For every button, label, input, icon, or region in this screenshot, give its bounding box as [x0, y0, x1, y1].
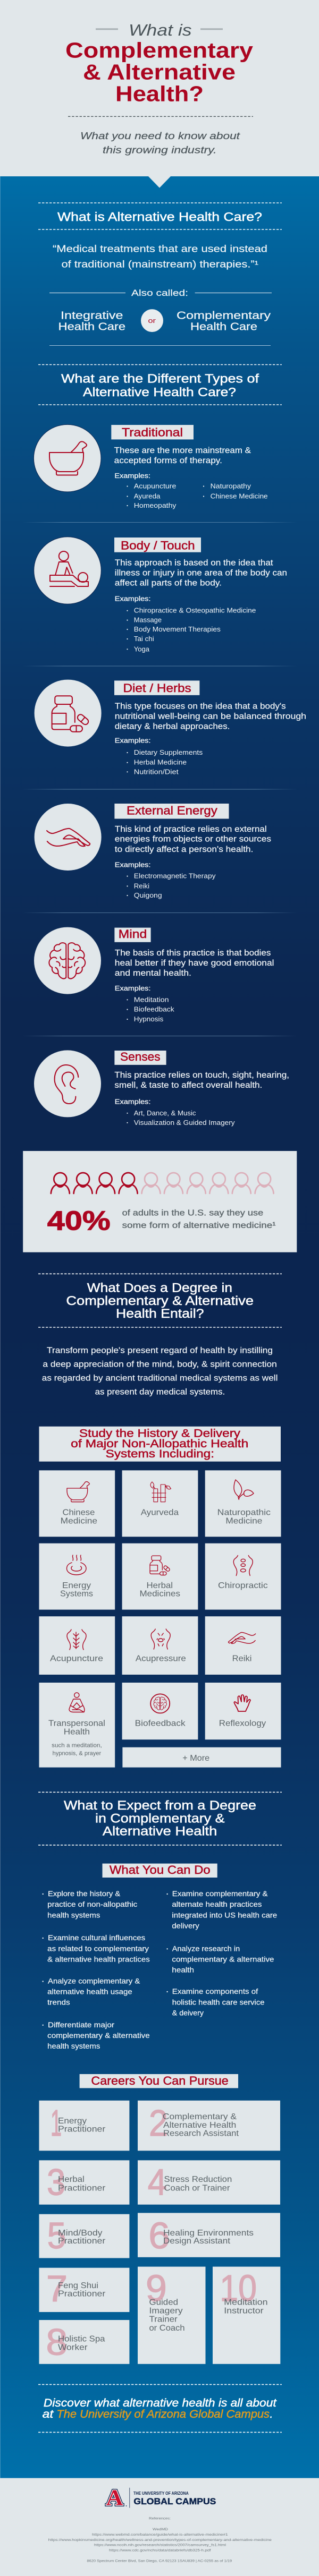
description: dietary & herbal approaches.: [115, 722, 230, 731]
label: Reflexology: [219, 1719, 266, 1728]
references: 8620 Spectrum Center Blvd, San Diego, CA 92123 1SAU839 | AC-0255 as of 1/19: [87, 2560, 232, 2563]
list: what you can do, left column: Analyze complementary &: [48, 1977, 140, 1985]
career 8: 8: [46, 2321, 68, 2362]
list: what you can do, left column: Differentiate major: [48, 2020, 114, 2029]
examples list: [115, 594, 256, 653]
description: [115, 559, 287, 588]
icon: mortar: [67, 1482, 89, 1502]
references: https://www.nccih.nih.gov/research/statistics/2007/camsurvey_fs1.html: [94, 2544, 226, 2547]
examples list: Biofeedback: [134, 1006, 174, 1013]
degree description: as regarded by ancient traditional medical systems as well: [42, 1374, 278, 1383]
description: [115, 949, 274, 978]
logo: A: [106, 2486, 123, 2510]
career 10: [213, 2267, 280, 2364]
label: Systems: [60, 1590, 93, 1599]
description: [114, 446, 251, 465]
career 5: Practitioner: [58, 2237, 106, 2246]
logo: A: [106, 2486, 123, 2510]
list: what you can do, left column: health systems: [47, 1910, 100, 1919]
card: ayurveda: [122, 1470, 198, 1537]
examples list: [114, 472, 268, 509]
logo: A: [106, 2486, 123, 2510]
subtitle: What you need to know about: [80, 131, 240, 141]
heading: traditional: Traditional: [122, 426, 183, 439]
heading: mind: [114, 927, 151, 942]
examples list: Homeopathy: [134, 502, 177, 509]
career 4: Stress Reduction: [164, 2175, 232, 2184]
career 5: 5: [47, 2215, 66, 2256]
statistic text: of adults in the U.S. say they use: [122, 1208, 263, 1217]
statistic text: [122, 1208, 275, 1230]
list: what you can do, left column: & alternative health practices: [47, 1955, 150, 1963]
heading: external energy: [114, 804, 229, 819]
heading: body touch: Body / Touch: [121, 539, 195, 552]
panel: study heading: [39, 1427, 281, 1462]
panel: study heading: Systems Including:: [106, 1448, 214, 1460]
examples list: Tai chi: [134, 635, 154, 643]
card: chiropractic: [205, 1543, 281, 1610]
icon: brain in circle: [150, 1694, 170, 1713]
label: Reiki: [232, 1654, 251, 1663]
career 9: [138, 2267, 205, 2364]
examples list: Acupuncture: [134, 482, 176, 490]
card: acupuncture: [39, 1616, 115, 1675]
logo: [106, 2486, 216, 2510]
career 5: Mind/Body: [58, 2229, 102, 2238]
call to action: [38, 2384, 282, 2432]
term: complementary health care: Complementary: [177, 310, 271, 322]
label: Naturopathic: [217, 1508, 271, 1517]
list: what you can do, left column: [43, 1889, 150, 2050]
panel: body touch: [34, 537, 287, 653]
examples list: Dietary Supplements: [134, 749, 203, 756]
icon: back needles: [67, 1630, 86, 1650]
icon: hand: [229, 1632, 256, 1643]
list: what you can do, right column: delivery: [172, 1922, 199, 1930]
career 1: [39, 2101, 129, 2151]
subtitle: this growing industry.: [103, 144, 217, 155]
description: These are the more mainstream &: [114, 446, 251, 455]
examples list: Examples:: [115, 594, 150, 602]
call to action: .: [270, 2408, 273, 2420]
list: what you can do, right column: Analyze research in: [172, 1944, 240, 1952]
label: Medicine: [61, 1517, 97, 1526]
description: heal better if they have good emotional: [115, 959, 274, 968]
footer: [0, 2478, 319, 2576]
header panel: [65, 21, 253, 155]
examples list: Quigong: [134, 892, 162, 899]
icon: open hand: [234, 1695, 250, 1711]
card: biofeedback: [122, 1683, 198, 1739]
statistic text: some form of alternative medicine¹: [122, 1221, 275, 1230]
description: accepted forms of therapy.: [114, 456, 222, 465]
examples list: Herbal Medicine: [134, 759, 187, 766]
description: smell, & taste to affect overall health.: [114, 1081, 262, 1090]
description: illness or injury in one area of the body can: [115, 569, 287, 578]
heading: senses: [114, 1050, 166, 1065]
label: Acupressure: [136, 1654, 186, 1663]
career 6: 6: [148, 2215, 170, 2256]
card: naturopathic medicine: [205, 1470, 281, 1537]
call to action: at: [43, 2408, 54, 2420]
section heading: degree: Health Entail?: [116, 1307, 204, 1321]
pictogram: 4 of 10 people: [51, 1173, 274, 1193]
list: what you can do, right column: Examine complementary &: [172, 1889, 268, 1898]
label: Chiropractic: [218, 1581, 268, 1590]
career 3: [39, 2160, 129, 2205]
description: This kind of practice relies on external: [115, 825, 267, 834]
career 9: 9: [146, 2267, 167, 2309]
career 2: 2: [149, 2102, 168, 2144]
label: Chinese: [63, 1508, 95, 1517]
panel: diet herbs: [35, 680, 306, 775]
description: The basis of this practice is that bodies: [115, 949, 271, 958]
section heading: degree: [38, 1274, 282, 1327]
career 6: [138, 2213, 280, 2257]
icon: energy: [67, 1555, 86, 1575]
references: https://www.hopkinsmedicine.org/health/wellness-and-prevention/types-of-complementary-and-alternative-medicine: [48, 2539, 272, 2542]
list: what you can do, left column: health systems: [47, 2042, 100, 2050]
label: Ayurveda: [141, 1508, 179, 1517]
examples list: Examples:: [115, 984, 150, 992]
career 2: Complementary &: [163, 2112, 237, 2121]
title: Health?: [115, 82, 204, 106]
section heading: what to expect: What to Expect from a Degree: [64, 1798, 256, 1813]
career 9: Imagery: [149, 2306, 183, 2316]
examples list: Hypnosis: [134, 1016, 163, 1023]
label: [61, 1508, 97, 1526]
list: what you can do, right column: holistic health care service: [172, 1998, 265, 2007]
card: energy systems: [39, 1543, 115, 1610]
icon: brain: [34, 927, 101, 994]
career 10: 10: [220, 2267, 257, 2309]
examples list: Yoga: [134, 645, 149, 653]
career 2: Research Assistant: [163, 2129, 239, 2138]
label: Herbal: [147, 1581, 173, 1590]
career 9: Trainer: [149, 2315, 178, 2324]
career 9: Guided: [149, 2298, 178, 2307]
examples list: Chiropractice & Osteopathic Medicine: [134, 607, 256, 615]
definition quote: “Medical treatments that are used instead: [53, 244, 267, 254]
list: what you can do, left column: as related to complementary: [47, 1944, 149, 1952]
examples list: Nutrition/Diet: [134, 768, 179, 775]
description: [114, 1071, 289, 1090]
heading: careers: Careers You Can Pursue: [91, 2074, 229, 2087]
career 7: Feng Shui: [58, 2281, 98, 2290]
panel: mind: [34, 927, 274, 1023]
career 8: Holistic Spa: [58, 2335, 105, 2343]
label: Energy: [62, 1581, 91, 1590]
career 8: Worker: [58, 2343, 88, 2352]
heading: external energy: External Energy: [127, 804, 217, 817]
icon: back pressure: [151, 1629, 170, 1649]
references: https://www.webmd.com/balance/guide/what-is-alternative-medicine#1: [92, 2534, 228, 2537]
examples list: Chinese Medicine: [211, 493, 268, 500]
icon: spine: [233, 1555, 253, 1575]
icon: leaves: [234, 1480, 254, 1499]
list: what you can do, right column: & deivery: [172, 2008, 204, 2017]
also called: Also called:: [131, 288, 188, 298]
card: transpersonal health: [39, 1683, 115, 1768]
examples list: Naturopathy: [211, 482, 251, 490]
label: such a meditation,: [52, 1743, 102, 1749]
references: References:: [149, 2518, 171, 2521]
label: Acupuncture: [50, 1654, 103, 1663]
label: [48, 1719, 105, 1757]
description: This type focuses on the idea that a body's: [115, 702, 286, 711]
examples list: Examples:: [114, 472, 150, 480]
heading: mind: Mind: [119, 927, 147, 941]
icon: bamboo: [150, 1482, 171, 1502]
section heading: what to expect: Alternative Health: [103, 1824, 217, 1838]
description: to directly affect a person's health.: [115, 845, 253, 854]
career 8: [39, 2320, 129, 2364]
degree description: [42, 1346, 278, 1396]
card: acupressure: [122, 1616, 198, 1675]
or badge: [141, 309, 163, 332]
label: Medicine: [225, 1517, 262, 1526]
card: chinese medicine: [39, 1470, 115, 1537]
label: [60, 1581, 93, 1599]
label: Health: [64, 1728, 90, 1737]
heading: senses: Senses: [120, 1050, 161, 1063]
call to action: Discover what alternative health is all about: [44, 2397, 277, 2409]
examples list: Examples:: [115, 737, 150, 745]
list: what you can do, right column: integrated into US health care: [172, 1910, 277, 1919]
examples list: Ayureda: [134, 493, 161, 500]
career 6: Healing Environments: [163, 2229, 254, 2238]
label: Medicines: [139, 1590, 180, 1599]
big number: 40%: [47, 1206, 111, 1236]
label: Biofeedback: [135, 1719, 186, 1728]
career 2: Alternative Health: [163, 2121, 236, 2130]
degree description: a deep appreciation of the mind, body, & spirit connection: [43, 1360, 277, 1369]
panel: senses: [34, 1050, 289, 1127]
label: hypnosis, & prayer: [53, 1751, 102, 1757]
call to action: The University of Arizona Global Campus: [56, 2408, 270, 2420]
panel: study heading: of Major Non-Allopathic Health: [71, 1438, 248, 1450]
panel: study heading: Study the History & Delivery: [79, 1428, 241, 1440]
section heading: what to expect: [38, 1792, 282, 1845]
career 5: [39, 2214, 129, 2258]
card: herbal medicines: [122, 1543, 198, 1610]
list: what you can do, right column: alternate health practices: [172, 1900, 262, 1908]
label: [139, 1581, 180, 1599]
heading: diet herbs: Diet / Herbs: [123, 681, 191, 695]
examples list: Body Movement Therapies: [134, 626, 221, 633]
term: complementary health care: [177, 310, 271, 332]
career 3: Practitioner: [58, 2183, 106, 2193]
references: [48, 2518, 272, 2563]
icon: bottle: [150, 1556, 170, 1575]
degree description: Transform people's present regard of health by instilling: [47, 1346, 273, 1355]
section heading: types: Alternative Health Care?: [83, 385, 236, 399]
examples list: [115, 984, 174, 1023]
career 4: 4: [148, 2162, 167, 2203]
icon: pill bottle: [35, 680, 102, 747]
examples list: Art, Dance, & Music: [134, 1110, 196, 1117]
list: what you can do, left column: Explore the history &: [48, 1889, 121, 1898]
examples list: [115, 861, 216, 899]
examples list: Visualization & Guided Imagery: [134, 1119, 235, 1127]
icon: meditation: [69, 1693, 85, 1712]
icon: mortar and pestle: [33, 424, 101, 492]
section heading: types: What are the Different Types of: [61, 372, 259, 386]
card: reiki: [205, 1616, 281, 1675]
heading: traditional: [111, 425, 194, 439]
career 7: [39, 2268, 129, 2312]
career 9: or Coach: [149, 2324, 185, 2333]
list: what you can do, left column: alternative health usage: [47, 1988, 132, 1996]
label: Transpersonal: [48, 1719, 105, 1728]
title: & Alternative: [83, 59, 236, 84]
panel: external energy: [35, 804, 271, 899]
section heading: types: [38, 364, 282, 405]
description: [115, 825, 271, 854]
examples list: Electromagnetic Therapy: [134, 873, 216, 880]
description: This approach is based on the idea that: [115, 559, 273, 568]
section heading: what to expect: in Complementary &: [95, 1811, 224, 1826]
examples list: [115, 737, 203, 775]
or badge: or: [148, 317, 156, 325]
card: reflexology: [205, 1683, 281, 1739]
career 6: Design Assistant: [163, 2237, 231, 2246]
card: more: [122, 1747, 281, 1768]
career 10: Meditation: [224, 2298, 268, 2307]
career 1: Practitioner: [58, 2125, 106, 2134]
icon: massage: [34, 537, 101, 604]
section heading: degree: Complementary & Alternative: [66, 1294, 254, 1308]
panel: 40 percent statistic: [23, 1151, 297, 1252]
career 4: Coach or Trainer: [164, 2183, 230, 2193]
list: what you can do, left column: complementary & alternative: [47, 2031, 150, 2040]
logo: GLOBAL CAMPUS: [133, 2496, 216, 2506]
examples list: Meditation: [134, 996, 169, 1003]
title: [65, 21, 253, 106]
definition quote: of traditional (mainstream) therapies.”¹: [62, 259, 258, 270]
header arrow: [148, 176, 171, 188]
logo: THE UNIVERSITY OF ARIZONA: [133, 2490, 189, 2496]
card: more: + More: [182, 1754, 209, 1763]
career 10: Instructor: [224, 2306, 264, 2316]
career 2: [138, 2101, 280, 2151]
description: nutritional well-being can be balanced through: [115, 712, 306, 721]
title: Complementary: [65, 38, 253, 63]
section heading: degree: What Does a Degree in: [87, 1281, 232, 1295]
career 1: 1: [51, 2102, 62, 2144]
section: what is alternative health care: [38, 203, 282, 346]
examples list: Massage: [134, 617, 162, 624]
references: WedMD: [153, 2528, 169, 2531]
definition quote: [53, 244, 267, 270]
heading: What is Alternative Health Care?: [57, 210, 262, 224]
list: what you can do, right column: complementary & alternative: [172, 1955, 274, 1963]
career 7: 7: [46, 2268, 68, 2309]
icon: ear: [34, 1050, 101, 1117]
list: what you can do, left column: Examine cultural influences: [48, 1933, 145, 1942]
career 3: Herbal: [58, 2175, 85, 2184]
career 3: 3: [47, 2162, 65, 2203]
panel: traditional: [33, 424, 268, 509]
subtitle: [80, 131, 240, 155]
description: This practice relies on touch, sight, hearing,: [114, 1071, 289, 1080]
career 1: Energy: [58, 2117, 87, 2126]
examples list: Reiki: [134, 882, 149, 890]
references: https://www.cdc.gov/nchs/data/databriefs/db325-h.pdf: [109, 2549, 211, 2553]
list: what you can do, left column: practice of non-allopathic: [47, 1900, 137, 1908]
term: complementary health care: Health Care: [190, 321, 257, 332]
career 4: [138, 2160, 280, 2205]
examples list: Examples:: [115, 1098, 150, 1106]
description: and mental health.: [115, 969, 191, 978]
label: [217, 1508, 271, 1526]
description: energies from objects or other sources: [115, 835, 271, 844]
list: what you can do, right column: health: [172, 1965, 194, 1974]
list: what you can do, left column: trends: [47, 1998, 70, 2007]
description: affect all parts of the body.: [115, 579, 222, 588]
list: what you can do, right column: [166, 1889, 277, 2017]
examples list: [115, 1098, 235, 1127]
list: what you can do, right column: Examine components of: [172, 1987, 258, 1995]
icon: hand: [35, 804, 102, 871]
description: [115, 702, 306, 731]
heading: diet herbs: [114, 680, 199, 695]
career 7: Practitioner: [58, 2289, 106, 2299]
term: integrative health care: Health Care: [58, 321, 125, 332]
term: integrative health care: [58, 310, 125, 332]
degree description: as present day medical systems.: [95, 1387, 225, 1396]
examples list: Examples:: [115, 861, 150, 869]
term: integrative health care: Integrative: [61, 310, 123, 322]
heading: what you can do: What You Can Do: [110, 1863, 211, 1876]
title: What is: [129, 21, 191, 39]
